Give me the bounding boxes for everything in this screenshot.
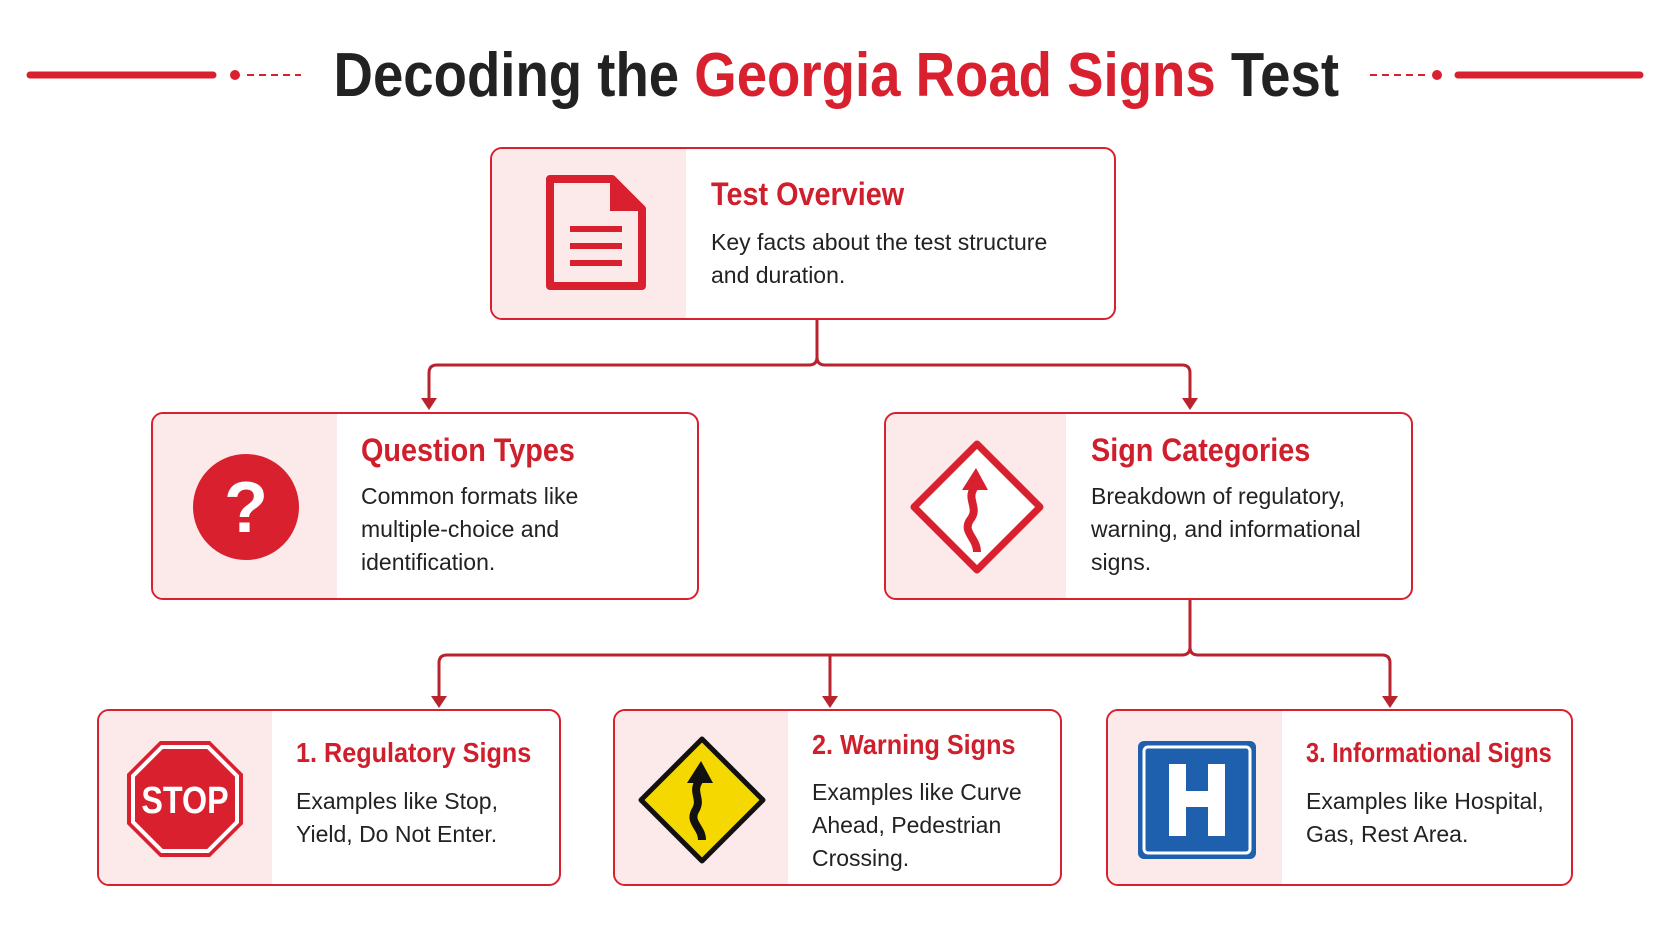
- panel: informational signs: Gas, Rest Area.: [1306, 821, 1468, 847]
- icon: question mark: ?: [224, 468, 268, 548]
- panel: question types: [151, 412, 699, 600]
- panel: regulatory signs: Yield, Do Not Enter.: [296, 821, 497, 847]
- panel: sign categories: Sign Categories: [1091, 432, 1310, 468]
- icon: diamond curve: [910, 440, 1044, 574]
- panel: regulatory signs: [97, 709, 561, 886]
- panel: informational signs: [1106, 709, 1573, 886]
- panel: warning signs: Ahead, Pedestrian: [812, 812, 1001, 838]
- panel: regulatory signs: 1. Regulatory Signs: [296, 737, 531, 768]
- panel: question types: Question Types: [361, 432, 575, 468]
- icon: document: [546, 175, 646, 290]
- panel: warning signs: Crossing.: [812, 845, 909, 871]
- panel: informational signs: Examples like Hospital,: [1306, 788, 1544, 814]
- panel: question types: multiple-choice and: [361, 516, 559, 542]
- panel: sign categories: warning, and informational: [1091, 516, 1361, 542]
- icon: stop sign: [127, 741, 243, 857]
- panel: warning signs: Examples like Curve: [812, 779, 1022, 805]
- panel: test overview: Test Overview: [711, 176, 904, 212]
- icon: question mark: [193, 454, 299, 560]
- panel: informational signs: 3. Informational Signs: [1306, 737, 1552, 768]
- panel: test overview: and duration.: [711, 262, 845, 288]
- panel: question types: Common formats like: [361, 483, 578, 509]
- panel: sign categories: Breakdown of regulatory,: [1091, 483, 1345, 509]
- panel: sign categories: [884, 412, 1413, 600]
- panel: warning signs: 2. Warning Signs: [812, 729, 1015, 760]
- icon: stop sign: STOP: [141, 780, 229, 822]
- title: Decoding the Georgia Road Signs Test: [333, 41, 1339, 110]
- panel: warning signs: [613, 709, 1062, 886]
- icon: hospital H: [1138, 741, 1256, 859]
- panel: sign categories: signs.: [1091, 549, 1151, 575]
- panel: test overview: Key facts about the test structure: [711, 229, 1047, 255]
- panel: test overview: [490, 147, 1116, 320]
- panel: regulatory signs: Examples like Stop,: [296, 788, 498, 814]
- icon: yellow curve sign: [638, 736, 766, 864]
- panel: question types: identification.: [361, 549, 495, 575]
